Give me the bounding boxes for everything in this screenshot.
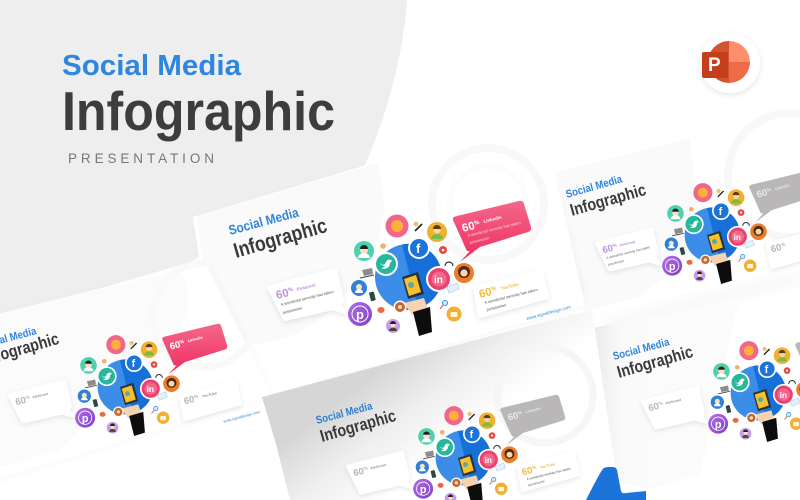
slide content: bottom-left: % xyxy=(179,339,185,346)
slide content: bottom-middle: Social Media xyxy=(315,400,375,427)
icon: facebook: f xyxy=(416,241,421,256)
slide content: top-right: A wonderful serenity has taken xyxy=(606,245,651,260)
slide content: bottom-middle: Pinterest xyxy=(370,463,387,471)
icon: envelope xyxy=(447,283,459,293)
chart: main social media icon cluster xyxy=(348,214,474,336)
icon: brown badge xyxy=(394,300,406,314)
icon: magnifier xyxy=(440,300,448,309)
slide content: bottom-middle: YouTube xyxy=(539,462,555,470)
callout: main Pinterest xyxy=(269,270,345,319)
slide content: top-right: Social Media xyxy=(565,173,624,201)
callout: main LinkedIn: possession xyxy=(469,235,490,245)
icon: purple avatar xyxy=(386,319,400,333)
callout: main LinkedIn: LinkedIn xyxy=(483,215,502,224)
icon: small phone xyxy=(414,222,422,231)
slide content: bottom-left xyxy=(0,324,260,436)
callout: main LinkedIn: 60 xyxy=(461,220,476,235)
slide content: top-right: % xyxy=(766,187,772,194)
slide content: top-right: 60 xyxy=(601,243,614,256)
slide content: bottom-right: Infographic xyxy=(615,342,695,382)
main slide title: Infographic xyxy=(231,214,330,263)
slide content: top-right: possession xyxy=(608,259,625,267)
icon: twitter xyxy=(374,252,398,276)
slide content: top-right: LinkedIn xyxy=(774,183,791,191)
slide content: bottom-middle: possession xyxy=(528,479,545,487)
big blue circle xyxy=(375,244,442,310)
callout: main Pinterest: % xyxy=(287,287,295,294)
panel: main slide xyxy=(193,112,585,397)
slide content: bottom-left: 60 xyxy=(169,339,182,353)
icon: linkedin: in xyxy=(434,275,443,286)
icon: pinterest: p xyxy=(356,307,364,322)
icon: woman avatar xyxy=(454,263,474,283)
slide content: bottom-left: YouTube xyxy=(201,391,217,399)
icon: pink badge xyxy=(386,214,408,238)
panel: bottom-middle slide xyxy=(262,310,620,500)
icon: teal avatar xyxy=(354,241,374,261)
icon: red chat xyxy=(377,307,385,313)
icon: PowerPoint badge: P xyxy=(708,55,721,76)
slide content: bottom-right: Social Media xyxy=(612,336,672,363)
website link: main slide: www.signaldesign.com xyxy=(526,304,571,321)
main slide title: Social Media xyxy=(227,205,301,238)
slide content: bottom-right xyxy=(612,330,800,442)
callout: main YouTube: A wonderful serenity has taken xyxy=(484,287,538,305)
callout: main LinkedIn: A wonderful serenity has taken xyxy=(467,220,521,238)
slide content: bottom-middle: 60 xyxy=(507,410,520,424)
slide content: top-right: % xyxy=(780,242,787,249)
shadow under top-right slide xyxy=(600,272,800,332)
slide content: bottom-left: www.signaldesign.com xyxy=(223,410,260,424)
slide content: bottom-left: 60 xyxy=(183,394,196,407)
callout: main YouTube: % xyxy=(490,286,498,293)
slide content: bottom-middle: A wonderful serenity has taken xyxy=(526,467,571,481)
slide content: top-right: % xyxy=(612,242,618,249)
panel: bottom-right slide xyxy=(590,288,800,490)
panel: top-right slide xyxy=(550,110,800,335)
slide content: bottom-middle: % xyxy=(363,465,369,472)
slide content: bottom-right: % xyxy=(658,400,664,407)
icon: hand holding phone xyxy=(402,272,432,336)
slide content: top-right xyxy=(565,172,800,284)
callout: main YouTube xyxy=(475,271,547,316)
slide content: bottom-middle: 60 xyxy=(352,466,365,479)
icon: blue avatar xyxy=(351,280,367,296)
slide content: bottom-middle xyxy=(315,395,578,500)
callout: main Pinterest: possession xyxy=(282,305,303,315)
icon: headset xyxy=(445,262,453,266)
slide content: top-right: Infographic xyxy=(568,180,648,220)
callout: main LinkedIn xyxy=(453,201,531,262)
slide content: top-right: Pinterest xyxy=(619,240,636,248)
slide content: bottom-right: 60 xyxy=(647,401,660,414)
icon: PowerPoint badge xyxy=(700,33,760,93)
slide content: bottom-middle: LinkedIn xyxy=(525,406,542,414)
callout: main Pinterest: 60 xyxy=(275,287,290,302)
slide content: bottom-middle: % xyxy=(531,465,538,472)
slide content: bottom-left: % xyxy=(25,394,31,401)
heading: Social Media: Social Media xyxy=(62,50,242,82)
heading: Infographic: Infographic xyxy=(62,80,335,142)
slide content: bottom-left: Pinterest xyxy=(32,392,49,400)
slide content: bottom-middle: 60 xyxy=(521,465,534,478)
icon: orange dot xyxy=(380,243,386,249)
callout: main LinkedIn: % xyxy=(473,220,481,227)
callout: main YouTube: 60 xyxy=(478,286,493,301)
icon: small device xyxy=(369,291,376,301)
callout: main YouTube: YouTube xyxy=(500,282,520,291)
callout: main Pinterest: A wonderful serenity has taken xyxy=(280,289,334,307)
background grey blob xyxy=(0,0,407,318)
icon: man avatar xyxy=(427,222,447,242)
slide content: bottom-left: LinkedIn xyxy=(187,335,204,343)
blue tab at bottom xyxy=(586,467,646,500)
slide content: bottom-left: 60 xyxy=(14,395,27,408)
panel: bottom-left slide xyxy=(0,262,272,478)
heading: Presentation: PRESENTATION xyxy=(68,151,214,166)
icon: laptop xyxy=(360,268,374,278)
slide content: bottom-left: % xyxy=(193,394,200,401)
slide content: top-right: 60 xyxy=(756,187,769,201)
icon: yellow badge xyxy=(446,306,462,322)
callout: main Pinterest: Pinterest xyxy=(296,282,316,292)
slide content: top-right: 60 xyxy=(770,242,783,255)
slide content: bottom-right: Pinterest xyxy=(665,398,682,406)
slide content: bottom-middle: % xyxy=(517,410,523,417)
icon: red dot xyxy=(439,246,447,254)
slide content: bottom-middle: Infographic xyxy=(318,406,398,446)
callout: main YouTube: possession xyxy=(486,302,507,312)
